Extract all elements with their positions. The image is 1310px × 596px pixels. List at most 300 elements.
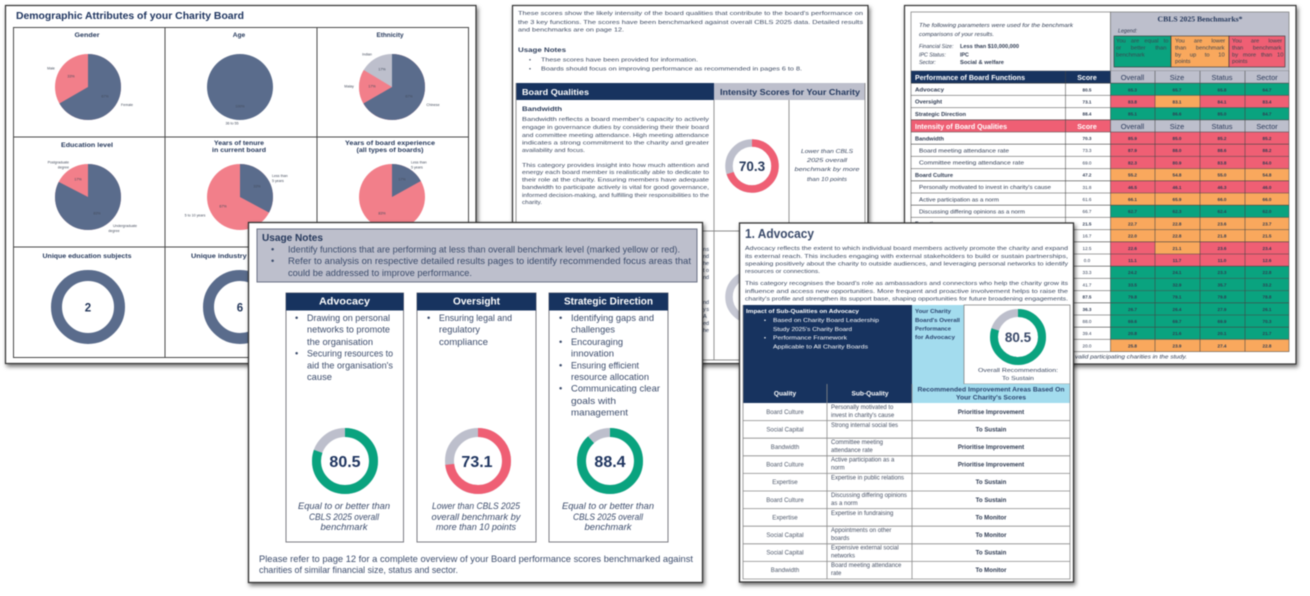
row: board meeting attendance rate: 88.0 (1173, 148, 1182, 153)
usage notes (518, 47, 803, 72)
row: expertise, fundraising: Expertise in fundraising (831, 511, 893, 517)
donut: bandwidth 70.3 (729, 143, 775, 189)
row: personally motivated: 46.3 (1218, 185, 1227, 190)
row: social capital, appointments: Social Capital (766, 532, 804, 539)
row: bandwidth, committee attendance: attendance rate (831, 448, 873, 454)
pie chart: education level: Undergraduate (113, 224, 137, 228)
row: discussing differing opinions: 66.7 (1083, 209, 1092, 214)
row: social capital, internal ties: Social Capital (766, 426, 804, 433)
row: advocacy: 65.3 (1128, 87, 1137, 92)
second row description fragment: nd (703, 275, 709, 281)
row: board culture, active participation: norm (831, 466, 845, 472)
pie chart: education level: degree (58, 166, 69, 170)
panel: usage notes and function scores (248, 222, 702, 582)
row: oversight: 84.1 (1218, 100, 1227, 104)
row: strategic direction: 86.6 (1173, 112, 1182, 117)
pie chart: education level: 83% (93, 212, 101, 216)
table header: performance of board functions: Performance of Board Functions (915, 73, 1025, 82)
card: advocacy: aid the organisation's (307, 360, 393, 370)
row: board culture: 54.8 (1173, 173, 1182, 178)
row: score 36.3: 26.4 (1173, 307, 1182, 312)
pie chart: gender: Gender (74, 32, 100, 39)
row: board culture, personally motivated: Board Culture (766, 409, 804, 416)
card: oversight: Lower than CBLS 2025 (432, 501, 521, 511)
table header: performance of board functions: Sector (1256, 73, 1278, 82)
row: board culture, differing opinions: Board Culture (766, 497, 804, 504)
benchmark parameters: IPC (960, 52, 969, 58)
bandwidth description: Bandwidth (522, 106, 562, 113)
intro text (518, 11, 863, 34)
row: score 39.4 (1083, 327, 1289, 339)
row: bandwidth, board meeting attendance: To Monitor (975, 567, 1007, 574)
row: active participation: 65.9 (1173, 197, 1182, 202)
row: score 88.0: 88.0 (1083, 319, 1092, 324)
row: score 12.5: 21.1 (1173, 246, 1182, 251)
pie chart: years of board experience: Years of board experience (345, 140, 435, 147)
second row description fragment: he (703, 328, 709, 334)
row: discussing differing opinions: 62.7 (1128, 209, 1137, 214)
pie chart: years of board experience (345, 140, 435, 230)
row: social capital, appointments: boards (831, 536, 849, 542)
row: score 20.0: 25.8 (1128, 343, 1137, 348)
pie chart: tenure in current board: in current board (212, 147, 266, 154)
card: oversight: compliance (439, 337, 488, 347)
card: oversight: • (427, 313, 430, 323)
row: discussing differing opinions: Discussing differing opinions as a norm (919, 210, 1026, 216)
row: strategic direction: 84.7 (1263, 112, 1272, 117)
card: strategic direction: innovation (571, 348, 614, 358)
row: oversight: 73.1 (1083, 100, 1092, 104)
donut: unique industry experience: 6 (237, 302, 243, 314)
benchmark parameters: IPC Status: (919, 52, 946, 58)
recommendations table header: Recommended Improvement Areas Based On (918, 388, 1065, 394)
row: advocacy: 65.7 (1173, 87, 1182, 92)
row: discussing differing opinions: 62.4 (1218, 209, 1227, 214)
pie chart: gender (47, 32, 133, 120)
row: expertise: 21.5 (1083, 221, 1092, 226)
heading: 1. advocacy: 1. Advocacy (745, 226, 815, 241)
legend: CBLS 2025 benchmarks: points (1175, 59, 1191, 65)
row: score 20.0: 23.9 (1173, 343, 1182, 348)
pie chart: tenure in current board: 33% (253, 184, 261, 188)
row: expertise, public relations: Expertise in public relations (831, 476, 904, 482)
card: strategic direction: Communicating clear (571, 384, 660, 394)
card: oversight: more than 10 points (436, 522, 516, 532)
card: strategic direction: Ensuring efficient (571, 360, 639, 370)
row: oversight (915, 95, 1289, 108)
row: board culture, active participation: Active participation as a (831, 458, 895, 464)
donut: oversight 73.1: 73.1 (461, 454, 493, 471)
row: score 20.0: 27.4 (1218, 343, 1227, 348)
second row description fragment: ed (703, 321, 709, 327)
row: active participation: 66.0 (1263, 197, 1272, 202)
intro text: These scores show the likely intensity of the board qualities that contribute to the board's performance on (518, 11, 863, 17)
recommendations table header: Your Charity's Scores (956, 396, 1027, 402)
table header: intensity of board qualities: Intensity of Board Qualities (915, 122, 1007, 131)
legend: CBLS 2025 benchmarks: than benchmark (1232, 46, 1282, 52)
table header: intensity of board qualities: Overall (1121, 122, 1145, 131)
row: score 36.3: 26.7 (1128, 307, 1137, 312)
row: social capital, external networks: Expensive external social (831, 546, 899, 552)
advocacy description: charity's profile and strengthen its support base, shaping opportunities for future broadening engagements. (745, 296, 1069, 302)
pie chart: ethnicity: 67% (405, 94, 413, 98)
bandwidth description: engage in governance duties by considering their their board (522, 125, 709, 131)
row: score 33.3: 24.1 (1173, 270, 1182, 275)
impact of sub-qualities block: • (764, 318, 766, 324)
row: bandwidth, board meeting attendance: rate (831, 571, 842, 577)
footer note: charities of similar financial size, status and sector. (259, 565, 458, 575)
legend: CBLS 2025 benchmarks: Legend: (1118, 28, 1138, 34)
impact of sub-qualities block: Performance Framework (773, 336, 847, 342)
row: expertise, fundraising: To Monitor (975, 514, 1007, 521)
row: oversight: 83.1 (1173, 100, 1182, 104)
row: score 0.0: 11.1 (1128, 258, 1137, 263)
overall performance label (912, 305, 964, 384)
row: advocacy: 80.5 (1083, 87, 1092, 92)
impact of sub-qualities block: Impact of Sub-Qualities on Advocacy (746, 309, 860, 315)
row: oversight: 83.4 (1263, 100, 1272, 104)
row: score 33.3: 23.3 (1218, 270, 1227, 275)
row: bandwidth, committee attendance: Committee meeting (831, 440, 883, 446)
donut: advocacy 80.5 (316, 432, 374, 490)
row: score 16.7: 16.7 (1083, 234, 1092, 239)
row: board culture (915, 169, 1289, 181)
second row description fragment: he (703, 261, 709, 267)
row: committee meeting attendance rate: 83.8 (1218, 160, 1227, 165)
row: score 39.4: 21.6 (1173, 331, 1182, 336)
row: score 87.5: 79.8 (1218, 295, 1227, 300)
row: score 87.5: 87.5 (1083, 295, 1092, 300)
pie chart: age: Age (233, 32, 246, 39)
row: strategic direction: Strategic Direction (915, 112, 966, 118)
table header: performance of board functions (911, 71, 1289, 83)
row: score 88.0 (1083, 315, 1289, 327)
row: score 87.5 (1083, 291, 1289, 303)
row: score 41.7: 33.2 (1263, 282, 1272, 287)
usage notes: Boards should focus on improving performance as recommended in pages 6 to 8. (541, 66, 803, 72)
usage notes box: Refer to analysis on respective detailed results pages to identify recommended focus areas that (288, 256, 691, 266)
usage notes box: • (271, 244, 274, 254)
row: advocacy: 64.7 (1263, 87, 1272, 92)
pie chart: ethnicity: Ethnicity (376, 32, 404, 39)
card: oversight: regulatory (439, 324, 480, 334)
legend: CBLS 2025 benchmarks (1110, 12, 1289, 71)
benchmark note: than 10 points (807, 177, 847, 183)
pie chart: education level: 17% (74, 178, 82, 182)
card: advocacy: Drawing on personal (307, 313, 390, 323)
usage notes box: Identify functions that are performing at less than overall benchmark level (marked yellow or red). (288, 244, 680, 254)
table header: performance of board functions: Overall (1121, 73, 1145, 82)
legend: CBLS 2025 benchmarks: or better than (1116, 46, 1166, 52)
card: strategic direction: Equal to or better than (562, 501, 654, 511)
pie chart: tenure in current board: 5 to 10 years (185, 214, 206, 218)
row: score 20.0: 20.0 (1083, 343, 1092, 348)
row: score 41.7: 41.7 (1083, 282, 1092, 287)
donut: strategic direction 88.4: 88.4 (594, 454, 626, 471)
overall performance label: for Advocacy (915, 335, 956, 341)
row: advocacy: 65.8 (1218, 87, 1227, 92)
row: expertise: 22.7 (1128, 221, 1137, 226)
benchmark parameters: Less than $10,000,000 (960, 44, 1019, 50)
pie chart: years of board experience: 17% (398, 178, 406, 182)
row: personally motivated: 31.8 (1083, 185, 1092, 190)
row: personally motivated: 46.0 (1263, 185, 1272, 190)
legend: CBLS 2025 benchmarks: than benchmark (1175, 46, 1225, 52)
row: board meeting attendance rate: 88.6 (1218, 148, 1227, 153)
pie chart: education level: Education level (61, 142, 113, 149)
pie chart: years of board experience: 83% (378, 212, 386, 216)
row: board meeting attendance rate: 87.9 (1128, 148, 1137, 153)
second row description fragment: ns (703, 247, 709, 253)
row: personally motivated (919, 181, 1289, 193)
row: board culture, differing opinions: as a norm (831, 501, 858, 507)
row: score 41.7 (1083, 278, 1289, 291)
row: score 88.0: 70.3 (1263, 319, 1272, 324)
row: score 39.4: 20.8 (1128, 331, 1137, 336)
second row description fragment: nd (703, 300, 709, 306)
row: score 88.0: 69.6 (1128, 319, 1137, 324)
row: expertise: Expertise (915, 222, 939, 228)
intro text: the 3 key functions. The scores have been benchmarked against overall CBLS 2025 data. Detailed results (518, 20, 863, 26)
legend: CBLS 2025 benchmarks: benchmark (1116, 52, 1145, 58)
row: score 39.4: 21.7 (1263, 331, 1272, 336)
row: bandwidth: 70.3 (1083, 136, 1092, 141)
row: personally motivated: 46.5 (1128, 185, 1137, 190)
row: social capital, internal ties (766, 423, 1007, 433)
benchmark note: benchmark by more (794, 167, 860, 173)
pie chart: gender: Male (47, 66, 55, 70)
row: active participation (919, 193, 1289, 205)
row: score 20.0 (1083, 339, 1289, 352)
row: oversight: Oversight (915, 100, 942, 106)
overall performance label: Board's Overall (915, 318, 961, 324)
footer note: Please refer to page 12 for a complete overview of your Board performance scores benchmarked against (259, 554, 693, 564)
pie chart: ethnicity: Malay (344, 84, 354, 88)
recommendations table header (743, 384, 1070, 403)
row: board culture, active participation: Board Culture (766, 462, 804, 469)
impact of sub-qualities block (743, 305, 912, 384)
donut: bandwidth 70.3: 70.3 (739, 159, 766, 174)
row: committee meeting attendance rate: 69.0 (1083, 160, 1092, 165)
row: personally motivated: Personally motivated to invest in charity's cause (919, 185, 1051, 191)
row: committee meeting attendance rate (919, 156, 1289, 169)
pie chart: years of board experience: (all types of boards) (356, 147, 424, 154)
pie chart: tenure in current board: Years of tenure (214, 140, 264, 147)
row: social capital, external networks: networks (831, 554, 855, 560)
advocacy description: Advocacy reflects the extent to which individual board members actively promote the charity and expand (745, 246, 1068, 252)
benchmark note: Lower than CBLS (801, 149, 853, 155)
table header: board qualities: Board Qualities (522, 87, 589, 97)
row: score 87.5: 79.8 (1128, 295, 1137, 300)
usage notes box: • (271, 256, 274, 266)
card: strategic direction: Strategic Direction (564, 296, 653, 308)
card: strategic direction: • (559, 337, 562, 347)
row: score 33.3 (1083, 266, 1289, 278)
second row description fragment: ys (703, 307, 709, 313)
row: active participation: Active participation as a norm (919, 197, 1000, 203)
row: bandwidth (915, 132, 1289, 144)
row: score 16.7: 22.0 (1128, 234, 1137, 239)
bandwidth description: This category provides insight into how much attention and (522, 163, 709, 169)
legend: CBLS 2025 benchmarks: You are equal to (1116, 38, 1169, 44)
row: score 87.5: 79.1 (1173, 295, 1182, 300)
bandwidth description: and committee meeting attendance. High meeting attendance (522, 133, 709, 139)
row: bandwidth: Bandwidth (915, 136, 944, 142)
row: score 33.3: 33.3 (1083, 270, 1092, 275)
row: score 12.5: 23.6 (1218, 246, 1227, 251)
bandwidth description: energy each board member is realistically able to dedicate to (522, 170, 709, 176)
row: social capital, external networks: To Sustain (976, 550, 1007, 557)
row: score 12.5: 22.6 (1128, 246, 1137, 251)
pie chart: education level (48, 142, 137, 233)
row: bandwidth, committee attendance (771, 440, 1024, 454)
row: score 16.7: 21.8 (1218, 234, 1227, 239)
card: advocacy: CBLS 2025 overall (309, 512, 380, 522)
row: board culture, personally motivated: Prioritise Improvement (958, 409, 1024, 416)
usage notes: These scores have been provided for information. (541, 58, 699, 64)
row: bandwidth, board meeting attendance (771, 563, 1007, 577)
row: score 33.3: 24.2 (1128, 270, 1137, 275)
pie chart: ethnicity: 17% (368, 84, 376, 88)
row: score 0.0: 0.0 (1084, 258, 1091, 263)
row: board culture: Board Culture (915, 173, 953, 179)
donut: advocacy 80.5: 80.5 (329, 454, 361, 471)
row: committee meeting attendance rate: 82.3 (1128, 160, 1137, 165)
panel: demographic attributes (6, 6, 476, 364)
card: advocacy: Securing resources to (307, 348, 393, 358)
row: score 20.0: 22.8 (1263, 343, 1272, 348)
table header: intensity of board qualities: Size (1170, 122, 1184, 131)
card: advocacy: • (295, 313, 298, 323)
row: score 0.0: 11.0 (1218, 258, 1227, 263)
row: strategic direction: 85.0 (1218, 112, 1227, 117)
benchmark parameters: Financial Size: (919, 44, 954, 50)
bandwidth description: charity. (522, 200, 542, 206)
row: committee meeting attendance rate: 80.9 (1173, 160, 1182, 165)
pie chart: tenure in current board (185, 140, 288, 230)
row: expertise, public relations (772, 476, 1007, 486)
impact of sub-qualities block: Applicable to All Charity Boards (773, 344, 868, 350)
advocacy description: resources or connections. (745, 269, 821, 275)
table header: performance of board functions: Score (1077, 75, 1097, 82)
row: board culture: 47.2 (1083, 173, 1092, 178)
demographic grid (14, 28, 468, 358)
usage notes box (257, 229, 697, 282)
panel: board qualities intensity scores (512, 6, 868, 364)
advocacy description: influence and access new opportunities. More frequent and proactive involvement helps to raise the (745, 289, 1068, 295)
row: social capital, appointments: To Monitor (975, 532, 1007, 539)
row: score 36.3: 36.3 (1083, 307, 1092, 312)
row: score 0.0 (1084, 254, 1289, 266)
row: social capital, appointments: Appointments on other (831, 528, 891, 534)
donut: overall advocacy 80.5: Overall Recommendation: (978, 368, 1059, 374)
recommendations table header: Sub-Quality (852, 390, 889, 398)
pie chart: education level: degree (108, 229, 120, 233)
second row description fragment (703, 247, 709, 334)
usage notes: Usage Notes (518, 47, 566, 54)
row: discussing differing opinions: 62.0 (1263, 209, 1272, 214)
table header: intensity of board qualities: Sector (1256, 122, 1278, 131)
usage notes: • (529, 66, 531, 72)
usage notes box: could be addressed to improve performance. (288, 268, 472, 278)
card: advocacy: • (295, 348, 298, 358)
row: score 16.7: 22.8 (1173, 234, 1182, 239)
second row description fragment: A (703, 314, 707, 320)
row: discussing differing opinions (919, 205, 1289, 217)
benchmark parameters: The following parameters were used for the benchmark (919, 23, 1073, 29)
row: board culture: 54.8 (1263, 173, 1272, 178)
pie chart: education level: Postgraduate (48, 160, 69, 164)
benchmark parameters: Sector: (919, 60, 936, 66)
row: bandwidth: 85.2 (1263, 136, 1272, 141)
row: board meeting attendance rate: 88.2 (1263, 148, 1272, 153)
donut: overall advocacy 80.5: To Sustain (1002, 376, 1034, 382)
intro text: and benchmarks are on page 12. (518, 28, 625, 34)
card: strategic direction: • (559, 313, 562, 323)
pie chart: tenure in current board: 5 years (272, 179, 284, 183)
card: advocacy (286, 293, 404, 542)
bandwidth description: availability and focus. (522, 148, 586, 154)
table header: board qualities (516, 83, 714, 100)
bandwidth description: bandwidth to participate actively is vital for good governance, (522, 185, 710, 191)
row: board culture, active participation: Prioritise Improvement (958, 462, 1024, 469)
card: strategic direction: Identifying gaps and (571, 313, 654, 323)
table header: intensity of board qualities: Score (1077, 124, 1097, 131)
donut: second quality, partly hidden (729, 274, 775, 320)
legend: CBLS 2025 benchmarks: You are lower (1232, 38, 1282, 44)
bandwidth description: Bandwidth reflects a board member's capacity to actively (522, 117, 709, 123)
row: board culture, differing opinions (766, 493, 1007, 507)
row: strategic direction (915, 108, 1289, 120)
pie chart: gender: Female (121, 103, 133, 107)
row: expertise, public relations: To Sustain (976, 479, 1007, 486)
donut: unique education subjects (42, 253, 132, 338)
card: strategic direction: resource allocation (571, 372, 649, 382)
bandwidth description: their role at the charity. Ensuring members have adequate (522, 178, 709, 184)
row: bandwidth, board meeting attendance: Board meeting attendance (831, 563, 902, 569)
row: active participation: 66.1 (1128, 197, 1137, 202)
donut: overall advocacy 80.5: 80.5 (1005, 330, 1032, 345)
row: bandwidth, committee attendance: Prioritise Improvement (958, 444, 1024, 451)
row: social capital, external networks: Social Capital (766, 550, 804, 557)
donut: unique industry experience: Unique industry experience (191, 253, 287, 260)
pie chart: ethnicity (344, 32, 440, 120)
row: bandwidth: 85.9 (1128, 136, 1137, 141)
pie chart: gender: 67% (101, 94, 109, 98)
legend: CBLS 2025 benchmarks: CBLS 2025 Benchmarks* (1158, 14, 1243, 24)
row: expertise: 22.8 (1173, 221, 1182, 226)
row: score 12.5 (1083, 242, 1289, 254)
row: bandwidth, committee attendance: Bandwidth (771, 444, 799, 451)
card: strategic direction: Encouraging (571, 337, 623, 347)
row: score 41.7: 32.9 (1173, 282, 1182, 287)
row: advocacy: Advocacy (915, 88, 944, 94)
donut: oversight 73.1 (450, 432, 506, 490)
donut: overall advocacy 80.5 (964, 305, 1070, 384)
heading: demographic attributes: Demographic Attributes of your Charity Board (16, 11, 244, 22)
table header: intensity scores (714, 83, 865, 100)
row: board culture: 55.0 (1218, 173, 1227, 178)
pie chart: years of board experience: Less than (411, 160, 427, 164)
impact of sub-qualities block: Study 2025's Charity Board (773, 327, 852, 333)
row: score 12.5: 12.5 (1083, 246, 1092, 251)
row: personally motivated: 46.1 (1173, 185, 1182, 190)
usage notes box: Usage Notes (262, 233, 323, 244)
legend: CBLS 2025 benchmarks: points (1232, 59, 1248, 65)
row: score 16.7: 21.5 (1263, 234, 1272, 239)
pie chart: years of board experience: 5 years (411, 166, 423, 170)
row: score 36.3 (1083, 303, 1289, 315)
